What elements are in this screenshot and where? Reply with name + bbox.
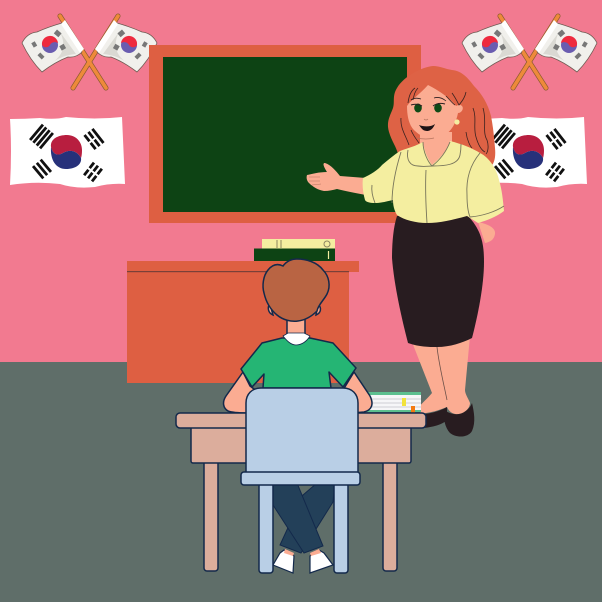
flags: crossed pair, top right — [462, 16, 597, 88]
teacher eyes — [411, 97, 446, 112]
student legs — [273, 483, 335, 573]
student collar — [283, 333, 310, 345]
teacher face — [407, 85, 463, 138]
teacher back hand — [478, 222, 495, 243]
stacked books — [254, 239, 335, 261]
student hair — [263, 259, 329, 321]
teacher neck — [420, 132, 452, 168]
teacher legs — [412, 336, 470, 414]
teacher — [307, 66, 504, 437]
teacher hair — [388, 66, 495, 168]
student ears — [268, 304, 320, 315]
ankle — [284, 549, 321, 556]
open book on student desk — [366, 392, 421, 413]
student neck — [287, 318, 305, 337]
floor — [0, 362, 602, 602]
teacher's desk — [127, 261, 359, 383]
student desk — [176, 413, 426, 571]
flag: large right — [472, 117, 587, 188]
teacher earring — [454, 119, 460, 125]
far trouser leg — [280, 483, 335, 553]
blackboard — [149, 45, 421, 223]
student shoes — [273, 550, 333, 573]
flags: crossed pair, top left — [22, 16, 157, 88]
teacher skirt — [392, 215, 484, 347]
teacher blouse seams — [372, 142, 504, 223]
student arms — [224, 372, 372, 413]
teacher blouse — [363, 141, 504, 223]
flag: large left — [10, 117, 125, 188]
near trouser leg — [273, 483, 323, 553]
teacher hair strands — [401, 88, 488, 154]
student — [224, 259, 372, 413]
teacher mouth — [419, 124, 435, 131]
teacher arm — [307, 163, 366, 195]
wall — [0, 0, 602, 362]
teacher shoes — [420, 403, 474, 437]
student chair — [241, 388, 360, 573]
student shirt — [241, 338, 356, 388]
